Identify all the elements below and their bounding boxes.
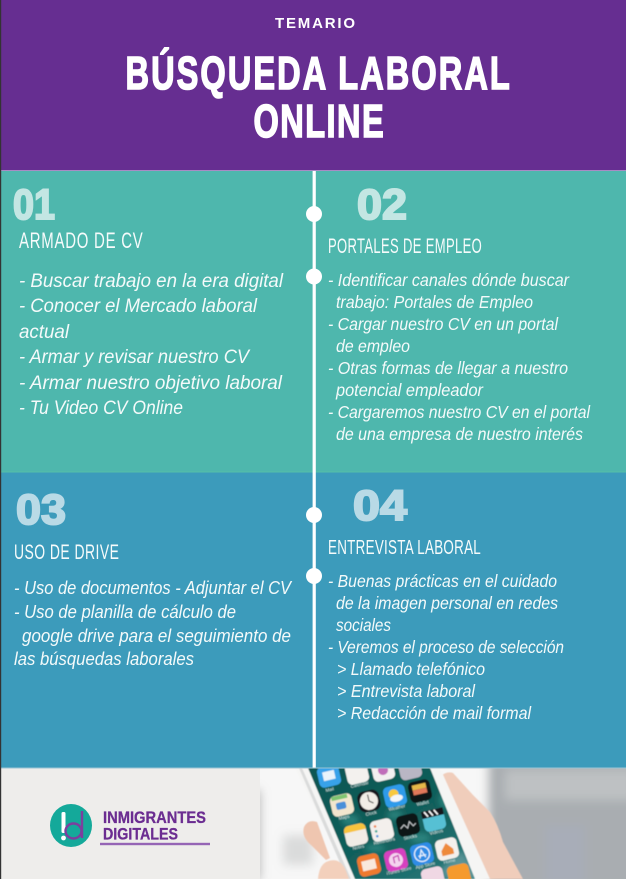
heading: portales de empleo: PORTALES DE EMPLEO: [328, 234, 482, 258]
app labels: Home: [443, 857, 456, 865]
panel: 04 entrevista laboral: [314, 472, 626, 768]
text block: temas 03: - Uso de planilla de cálculo de: [14, 602, 236, 622]
app labels: Notes: [352, 843, 365, 851]
text block: temas 01: [19, 271, 284, 419]
text block: temas 02: - Identificar canales dónde buscar: [328, 270, 570, 290]
app labels: Mail: [325, 786, 334, 793]
app labels: App Store: [415, 860, 436, 870]
text block: temas 04: - Buenas prácticas en el cuidado: [328, 571, 557, 591]
text block: temas 01: - Conocer el Mercado laboral: [19, 296, 258, 317]
finger: [318, 860, 349, 879]
text block: temas 02: de empleo: [336, 336, 410, 356]
app labels: Clock: [365, 809, 378, 817]
label: temario: TEMARIO: [275, 15, 355, 32]
app labels: Maps: [338, 813, 351, 821]
phone screen: [308, 768, 475, 879]
heading: uso de drive: USO DE DRIVE: [14, 540, 119, 564]
text block: temas 03: google drive para el seguimiento de: [22, 626, 291, 646]
phone body: [295, 768, 490, 879]
timeline with dots: [306, 171, 322, 768]
text block: temas 02: de una empresa de nuestro interés: [336, 424, 583, 444]
text block: temas 01: actual: [19, 322, 70, 343]
heading: armado de cv: ARMADO DE CV: [19, 228, 143, 253]
title: [126, 46, 510, 148]
number 02: 02: [357, 181, 407, 229]
text block: temas 04: - Veremos el proceso de selección: [328, 637, 564, 657]
hand: [436, 772, 523, 879]
logo text: DIGITALES: [103, 826, 178, 844]
heading: entrevista laboral: ENTREVISTA LABORAL: [328, 536, 481, 559]
text block: temas 01: - Armar y revisar nuestro CV: [19, 347, 251, 368]
text block: temas 02: [328, 270, 591, 444]
app icons: [316, 768, 472, 879]
text block: temas 04: > Llamado telefónico: [337, 659, 485, 679]
text block: temas 03: [14, 578, 293, 669]
screen texture: [341, 792, 480, 879]
title: ONLINE: [254, 95, 384, 148]
text block: temas 02: potencial empleador: [335, 380, 484, 400]
number 03: 03: [16, 486, 66, 534]
text block: temas 02: - Cargar nuestro CV en un portal: [328, 314, 559, 334]
text block: temas 04: > Entrevista laboral: [337, 681, 476, 701]
app labels: Wallet: [416, 799, 430, 807]
text block: temas 04: [328, 571, 564, 723]
app labels: iTunes Store: [386, 865, 412, 876]
logo text: INMIGRANTES: [103, 809, 206, 827]
text block: temas 03: - Uso de documentos - Adjuntar el CV: [14, 578, 293, 598]
panel: 03 uso de drive: [0, 472, 314, 768]
panel: 01 armado de cv: [0, 171, 314, 472]
panel: header: [0, 0, 626, 172]
photo: hand holding phone: [260, 768, 626, 879]
text block: temas 01: - Armar nuestro objetivo laboral: [19, 373, 283, 394]
number 01: 01: [13, 181, 55, 229]
app labels: Reminders: [373, 836, 396, 846]
panel: footer logo: [0, 768, 260, 879]
text block: temas 01: - Tu Video CV Online: [19, 398, 183, 419]
text block: temas 02: trabajo: Portales de Empleo: [336, 292, 533, 312]
text block: temas 04: > Redacción de mail formal: [337, 703, 532, 723]
text block: temas 01: - Buscar trabajo en la era digital: [19, 271, 284, 292]
text block: temas 04: de la imagen personal en redes: [336, 593, 558, 613]
app labels: Stocks: [403, 833, 418, 841]
app labels: [325, 780, 456, 876]
number 04: 04: [353, 482, 407, 530]
title: BÚSQUEDA LABORAL: [126, 46, 510, 100]
panel: 02 portales de empleo: [314, 171, 626, 472]
app labels: Calendar: [350, 780, 370, 789]
app labels: Videos: [429, 828, 444, 836]
text block: temas 03: las búsquedas laborales: [14, 649, 194, 669]
app labels: Weather: [388, 803, 406, 812]
text block: temas 04: sociales: [336, 615, 391, 635]
text block: temas 02: - Cargaremos nuestro CV en el portal: [328, 402, 591, 422]
text block: temas 02: - Otras formas de llegar a nuestro: [328, 358, 568, 378]
logo icon: [50, 804, 92, 847]
logo text: [103, 809, 206, 844]
